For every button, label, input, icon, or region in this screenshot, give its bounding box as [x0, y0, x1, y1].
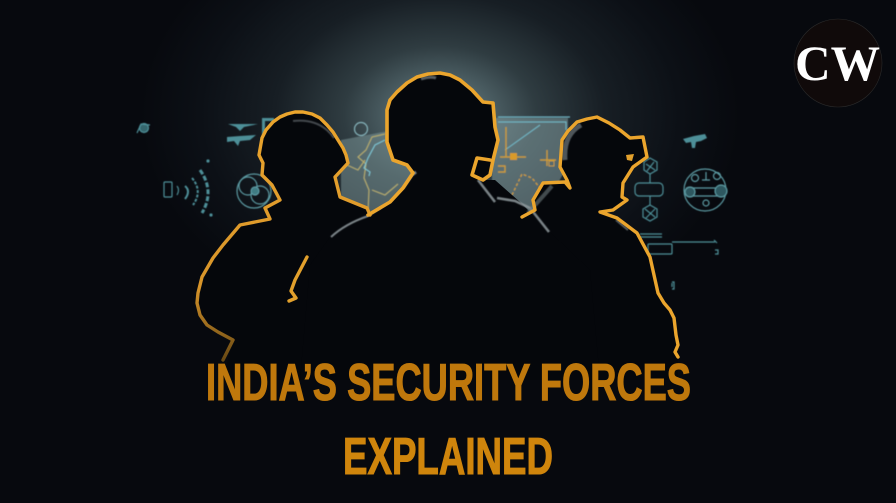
tactical lines: blue river [364, 140, 385, 176]
icon: circular schematic [684, 169, 727, 211]
panel: tactical map backdrop [341, 117, 570, 225]
outline: left soldier arm [289, 257, 307, 301]
outline: left soldier [197, 112, 370, 360]
title: INDIA’S SECURITY FORCES [206, 354, 691, 412]
icon: hexagon nodes [635, 158, 663, 221]
goggle accent [626, 154, 634, 161]
title [206, 354, 691, 486]
outline: right soldier [522, 117, 678, 357]
logo: CW badge [794, 19, 882, 107]
icons: right technology cluster [635, 134, 727, 289]
icon: globe small [137, 124, 150, 133]
tactical lines: right frame [498, 117, 570, 220]
icon: phone with signal arcs [164, 160, 212, 216]
silhouette: centre soldier [300, 73, 600, 380]
icon: radar globe [237, 174, 271, 208]
icon: aircraft [683, 134, 707, 148]
silhouette: left soldier [197, 112, 420, 380]
logo: CW badge: CW [795, 35, 880, 91]
outline: centre soldier [368, 73, 498, 215]
icon: data lines [640, 234, 718, 289]
tactical lines: left map [347, 122, 398, 212]
icons: left technology cluster [137, 118, 274, 216]
tactical lines: amber circuit [498, 127, 556, 195]
soldier silhouettes [197, 73, 678, 380]
silhouette: right soldier [470, 117, 678, 380]
title: EXPLAINED [343, 428, 553, 486]
icon: drones [227, 118, 274, 146]
highlights: grey rims [293, 77, 628, 237]
